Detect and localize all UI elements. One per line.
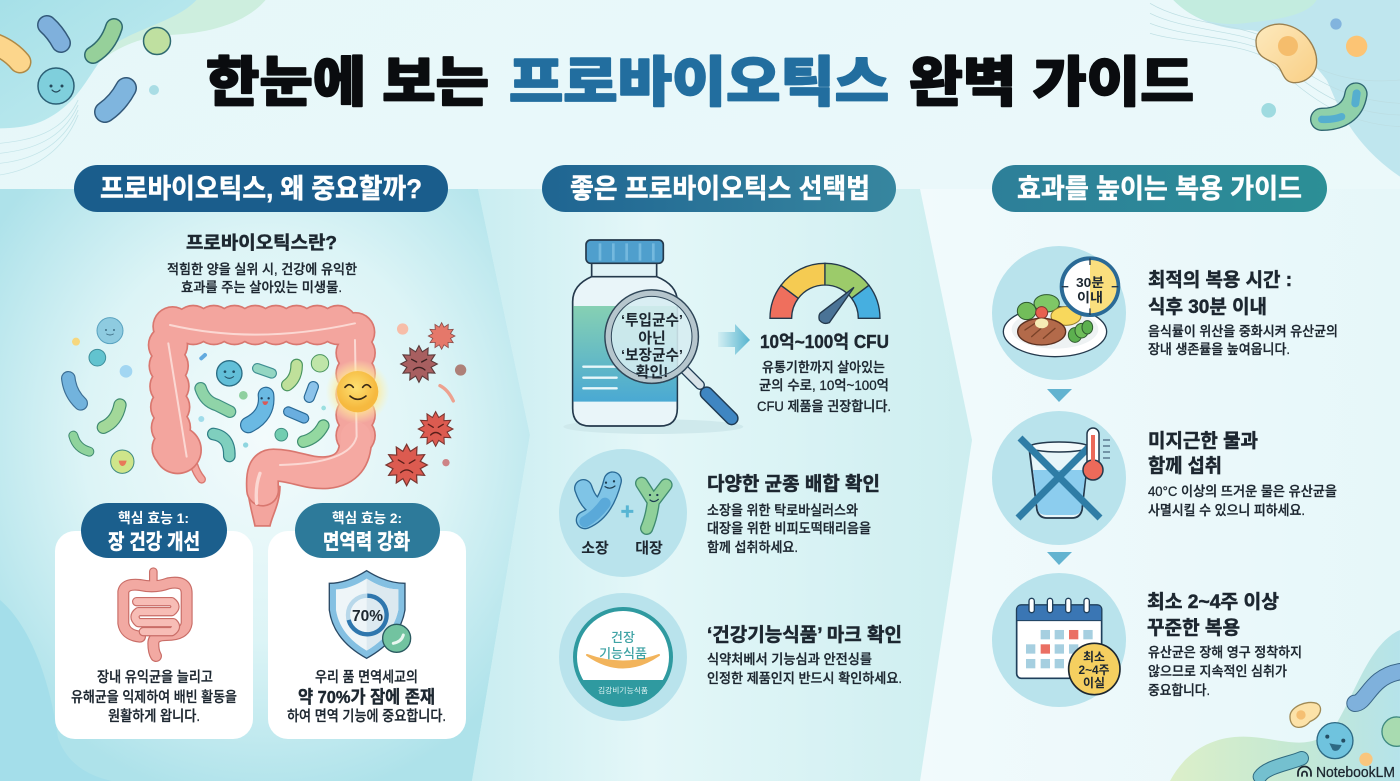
text block: consistency: 유산균은 장해 영구 정착하지 <box>1148 645 1302 660</box>
panel: middle column background <box>472 189 972 781</box>
text block: 원활하게 왑니다. <box>108 708 200 725</box>
text block <box>287 669 446 725</box>
text block: consistency: 꾸준한 복용 <box>1147 617 1240 639</box>
helpful bacteria inside <box>198 355 329 456</box>
text block: lukewarm water: 40°C 이상의 뜨거운 물은 유산균을 <box>1148 484 1337 499</box>
icon: calendar with 2-4 weeks badge: 이실 <box>1083 676 1105 690</box>
text block: timing: 장내 생존률을 높여웁니다. <box>1148 342 1290 357</box>
icon: calendar with 2-4 weeks badge <box>992 573 1126 707</box>
arrow: step 2 to 3 <box>1047 552 1072 565</box>
badge pill: benefit 1 <box>81 503 227 558</box>
watermark: NotebookLM: NotebookLM <box>1316 765 1395 781</box>
heading pill: how to choose: 좋은 프로바이오틱스 선택법 <box>570 174 870 204</box>
heading pill: why it matters <box>74 165 448 212</box>
text block: definition: 효과를 주는 살아있는 미생물. <box>181 280 342 295</box>
label: lens text: 확인! <box>636 364 668 381</box>
icon: shield 70% <box>329 571 411 658</box>
title <box>206 53 1194 113</box>
text block: consistency: 중요합니다. <box>1148 683 1210 698</box>
heading pill: dosage guide <box>992 165 1327 212</box>
icon: small and large intestine strains: 소장 <box>581 540 609 557</box>
icon: small and large intestine strains <box>559 449 687 577</box>
badge pill: benefit 1: 핵심 효능 1: <box>118 510 189 526</box>
text block: CFU recommendation: 10억~100억 CFU <box>760 332 889 352</box>
decoration: top-right blobs and cells <box>1150 0 1400 177</box>
arrow: bottle to gauge <box>718 324 750 355</box>
decoration: bottom-left blob <box>0 600 112 781</box>
label: 70%: 70% <box>352 608 383 625</box>
text block: lukewarm water <box>1148 430 1337 518</box>
panel: right column background <box>920 189 1400 781</box>
title: 한눈에 보는 <box>206 53 489 113</box>
text block: lukewarm water: 사멸시킬 수 있으니 피하세요. <box>1148 503 1305 518</box>
label: lens text <box>621 312 683 381</box>
harmful germs, right <box>386 323 466 486</box>
text block: consistency: 최소 2~4주 이상 <box>1147 591 1279 613</box>
text block: CFU recommendation: 유통기한까지 살아있는 <box>762 360 885 375</box>
icon: meal and 30 minute clock: 이내 <box>1077 290 1103 305</box>
badge pill: benefit 2: 핵심 효능 2: <box>332 510 402 526</box>
arrow: step 1 to 2 <box>1047 389 1072 402</box>
text block: certification mark <box>707 624 902 686</box>
text block <box>71 669 237 725</box>
text block: definition <box>167 233 357 295</box>
illustration: large intestine with friendly bacteria <box>68 318 466 526</box>
icon: health functional food mark <box>559 593 687 721</box>
icon: meal and 30 minute clock: 30분 <box>1076 275 1104 290</box>
label: lens text: ‘투입균수’ <box>621 312 683 329</box>
chart: CFU gauge <box>770 263 880 323</box>
card: gut health <box>55 531 253 739</box>
label: lens text: 아닌 <box>638 330 666 347</box>
decoration: top-left blobs and bacteria <box>0 0 266 175</box>
text block: timing <box>1148 269 1338 357</box>
text block: lukewarm water: 함께 섭취 <box>1148 455 1222 477</box>
badge pill: benefit 1: 장 건강 개선 <box>108 531 200 554</box>
badge pill: benefit 2 <box>295 503 440 558</box>
text block: certification mark: ‘건강기능식품’ 마크 확인 <box>707 624 902 646</box>
title: 프로바이오틱스 <box>509 53 889 113</box>
decoration: bottom-right blob and cells <box>1170 630 1400 781</box>
text block: strain mix: 소장을 위한 탁로바실러스와 <box>707 503 859 518</box>
text block: CFU recommendation <box>757 332 891 414</box>
icon: small intestine <box>123 572 187 656</box>
text block: certification mark: 식약처베서 기능심과 안전싱를 <box>707 652 872 667</box>
card: immunity <box>268 531 466 739</box>
text block: definition: 적힘한 양을 실위 시, 건강에 유익한 <box>167 261 357 277</box>
text block: timing: 식후 30분 이내 <box>1148 296 1267 318</box>
heading pill: how to choose <box>542 165 896 212</box>
text block: 약 70%가 잠에 존재 <box>298 687 435 707</box>
text block: strain mix: 함께 섭취하세요. <box>707 540 798 555</box>
text block: 하여 면역 기능에 중요합니다. <box>287 708 446 725</box>
icon: health functional food mark: 기능식품 <box>599 646 647 661</box>
icon: calendar with 2-4 weeks badge: 2~4주 <box>1078 663 1110 677</box>
smiling glow <box>326 360 390 424</box>
text block: strain mix: 다양한 균종 배합 확인 <box>707 473 880 495</box>
free bacteria, left <box>68 318 134 473</box>
text block: strain mix: 대장을 위한 비피도떡태리음을 <box>707 521 871 536</box>
text block: lukewarm water: 미지근한 물과 <box>1148 430 1258 452</box>
text block: timing: 음식률이 위산을 중화시켜 유산균의 <box>1148 324 1338 339</box>
text block: certification mark: 인정한 제품인지 반드시 확인하세요. <box>707 671 902 686</box>
icon: calendar with 2-4 weeks badge: 최소 <box>1083 650 1105 664</box>
heading pill: why it matters: 프로바이오틱스, 왜 중요할까? <box>100 174 422 204</box>
text block: consistency <box>1147 591 1302 698</box>
text block: 장내 유익균을 늘리고 <box>97 669 213 686</box>
text block: 우리 품 면역세교의 <box>315 669 418 686</box>
badge pill: benefit 2: 면역력 강화 <box>323 531 410 554</box>
text block: CFU recommendation: CFU 제품을 긘장합니다. <box>757 399 891 414</box>
heading pill: dosage guide: 효과를 높이는 복용 가이드 <box>1017 174 1302 204</box>
intestine tube <box>168 323 357 526</box>
text block: definition: 프로바이오틱스란? <box>186 233 337 253</box>
label: lens text: ‘보장균수’ <box>621 347 683 364</box>
text block: CFU recommendation: 균의 수로, 10억~100억 <box>759 378 889 393</box>
icon: crossed hot water and thermometer <box>992 411 1126 545</box>
panel: left column background <box>0 189 530 781</box>
icon: meal and 30 minute clock <box>992 246 1126 380</box>
icon: health functional food mark: 건장 <box>611 630 635 645</box>
title: 완벽 가이드 <box>909 53 1194 113</box>
illustration: supplement bottle with magnifier <box>563 240 743 434</box>
text block: strain mix <box>707 473 880 555</box>
icon: small and large intestine strains: 대장 <box>635 540 663 557</box>
text block: timing: 최적의 복용 시간 : <box>1148 269 1292 291</box>
icon: health functional food mark: 김강비기능식품 <box>598 685 648 695</box>
text block: 유해균을 익제하여 배빈 활동을 <box>71 689 237 706</box>
text block: consistency: 않으므로 지속적인 심취가 <box>1148 664 1288 679</box>
icon: top-left bacteria group <box>0 25 170 112</box>
